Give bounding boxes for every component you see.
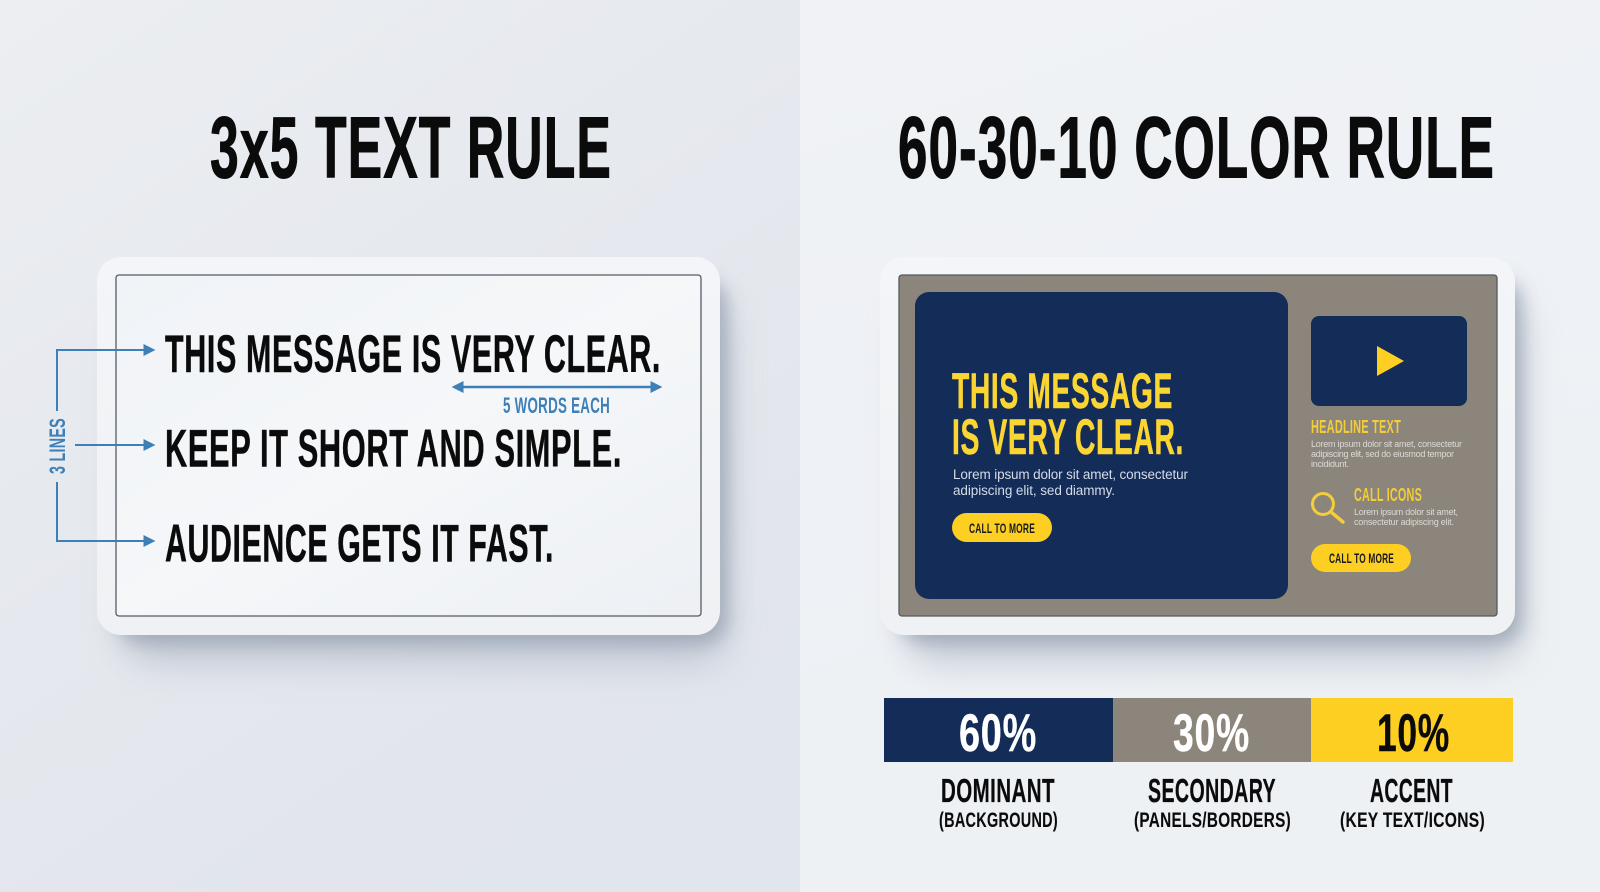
dominant navy panel: adipiscing elit, sed diammy. <box>953 483 1115 498</box>
icon: play <box>1377 346 1404 376</box>
legend: accent: ACCENT <box>1370 772 1453 809</box>
chart: 60-30-10 proportion bar <box>884 698 1513 763</box>
call icons heading: CALL ICONS <box>1354 485 1422 505</box>
icon: magnifier <box>1312 494 1343 522</box>
bracket: 3 lines arrows <box>45 350 153 541</box>
legend: accent <box>1340 772 1485 832</box>
card body <box>880 257 1515 635</box>
sidebar body text: adipiscing elit, sed do eiusmod tempor <box>1311 449 1454 459</box>
card shadow <box>125 300 725 660</box>
panel: color rule card <box>880 257 1521 660</box>
right background panel <box>800 0 1600 892</box>
legend: dominant <box>939 772 1058 832</box>
segment: 30% secondary <box>1113 698 1311 763</box>
segment: 10% accent <box>1311 698 1513 763</box>
sidebar button: CALL TO MORE <box>1329 550 1394 566</box>
legend: secondary: (PANELS/BORDERS) <box>1134 809 1291 832</box>
video thumbnail <box>1311 316 1467 406</box>
slide body text: Lorem ipsum dolor sit amet, consectetur <box>953 467 1188 482</box>
sidebar body text <box>1311 439 1462 469</box>
legend: secondary <box>1134 772 1291 832</box>
legend: dominant: (BACKGROUND) <box>939 809 1058 832</box>
card body <box>97 257 720 635</box>
lower bracket arrow <box>57 482 153 541</box>
sidebar body text: Lorem ipsum dolor sit amet, consectetur <box>1311 439 1462 449</box>
sidebar body text: incididunt. <box>1311 459 1349 469</box>
legend: dominant: DOMINANT <box>941 772 1055 809</box>
label: 3 lines: 3 LINES <box>45 418 70 474</box>
upper bracket arrow <box>57 350 153 411</box>
legend: accent: (KEY TEXT/ICONS) <box>1340 809 1485 832</box>
slide headline: THIS MESSAGE <box>952 363 1173 419</box>
segment: 30% secondary: 30% <box>1173 704 1250 763</box>
card shadow <box>908 300 1520 660</box>
call to action button <box>952 513 1052 542</box>
panel: text rule card <box>97 257 726 660</box>
legend: secondary: SECONDARY <box>1148 772 1276 809</box>
call to action button: CALL TO MORE <box>969 520 1035 536</box>
dominant navy panel <box>915 292 1288 599</box>
dominant navy panel: IS VERY CLEAR. <box>952 409 1184 465</box>
title: 3x5 text rule: 3x5 TEXT RULE <box>210 100 612 196</box>
message line 3: AUDIENCE GETS IT FAST. <box>165 514 554 574</box>
call icons body text: Lorem ipsum dolor sit amet, <box>1354 507 1458 517</box>
label: 5 words each: 5 WORDS EACH <box>503 393 610 418</box>
segment: 60% dominant <box>884 698 1113 763</box>
sidebar button <box>1311 544 1411 572</box>
arrow: 5 words span <box>454 386 660 388</box>
middle arrow <box>75 444 153 446</box>
slide frame <box>116 275 701 616</box>
left background panel <box>0 0 800 892</box>
sidebar headline: HEADLINE TEXT <box>1311 417 1401 437</box>
slide frame secondary colour <box>899 275 1497 616</box>
segment: 10% accent: 10% <box>1377 704 1450 763</box>
call icons body text: consectetur adipiscing elit. <box>1354 517 1454 527</box>
call icons body text <box>1354 507 1458 527</box>
message line 2: KEEP IT SHORT AND SIMPLE. <box>165 420 622 478</box>
segment: 60% dominant: 60% <box>959 704 1037 763</box>
message line 1: THIS MESSAGE IS VERY CLEAR. <box>165 325 661 384</box>
